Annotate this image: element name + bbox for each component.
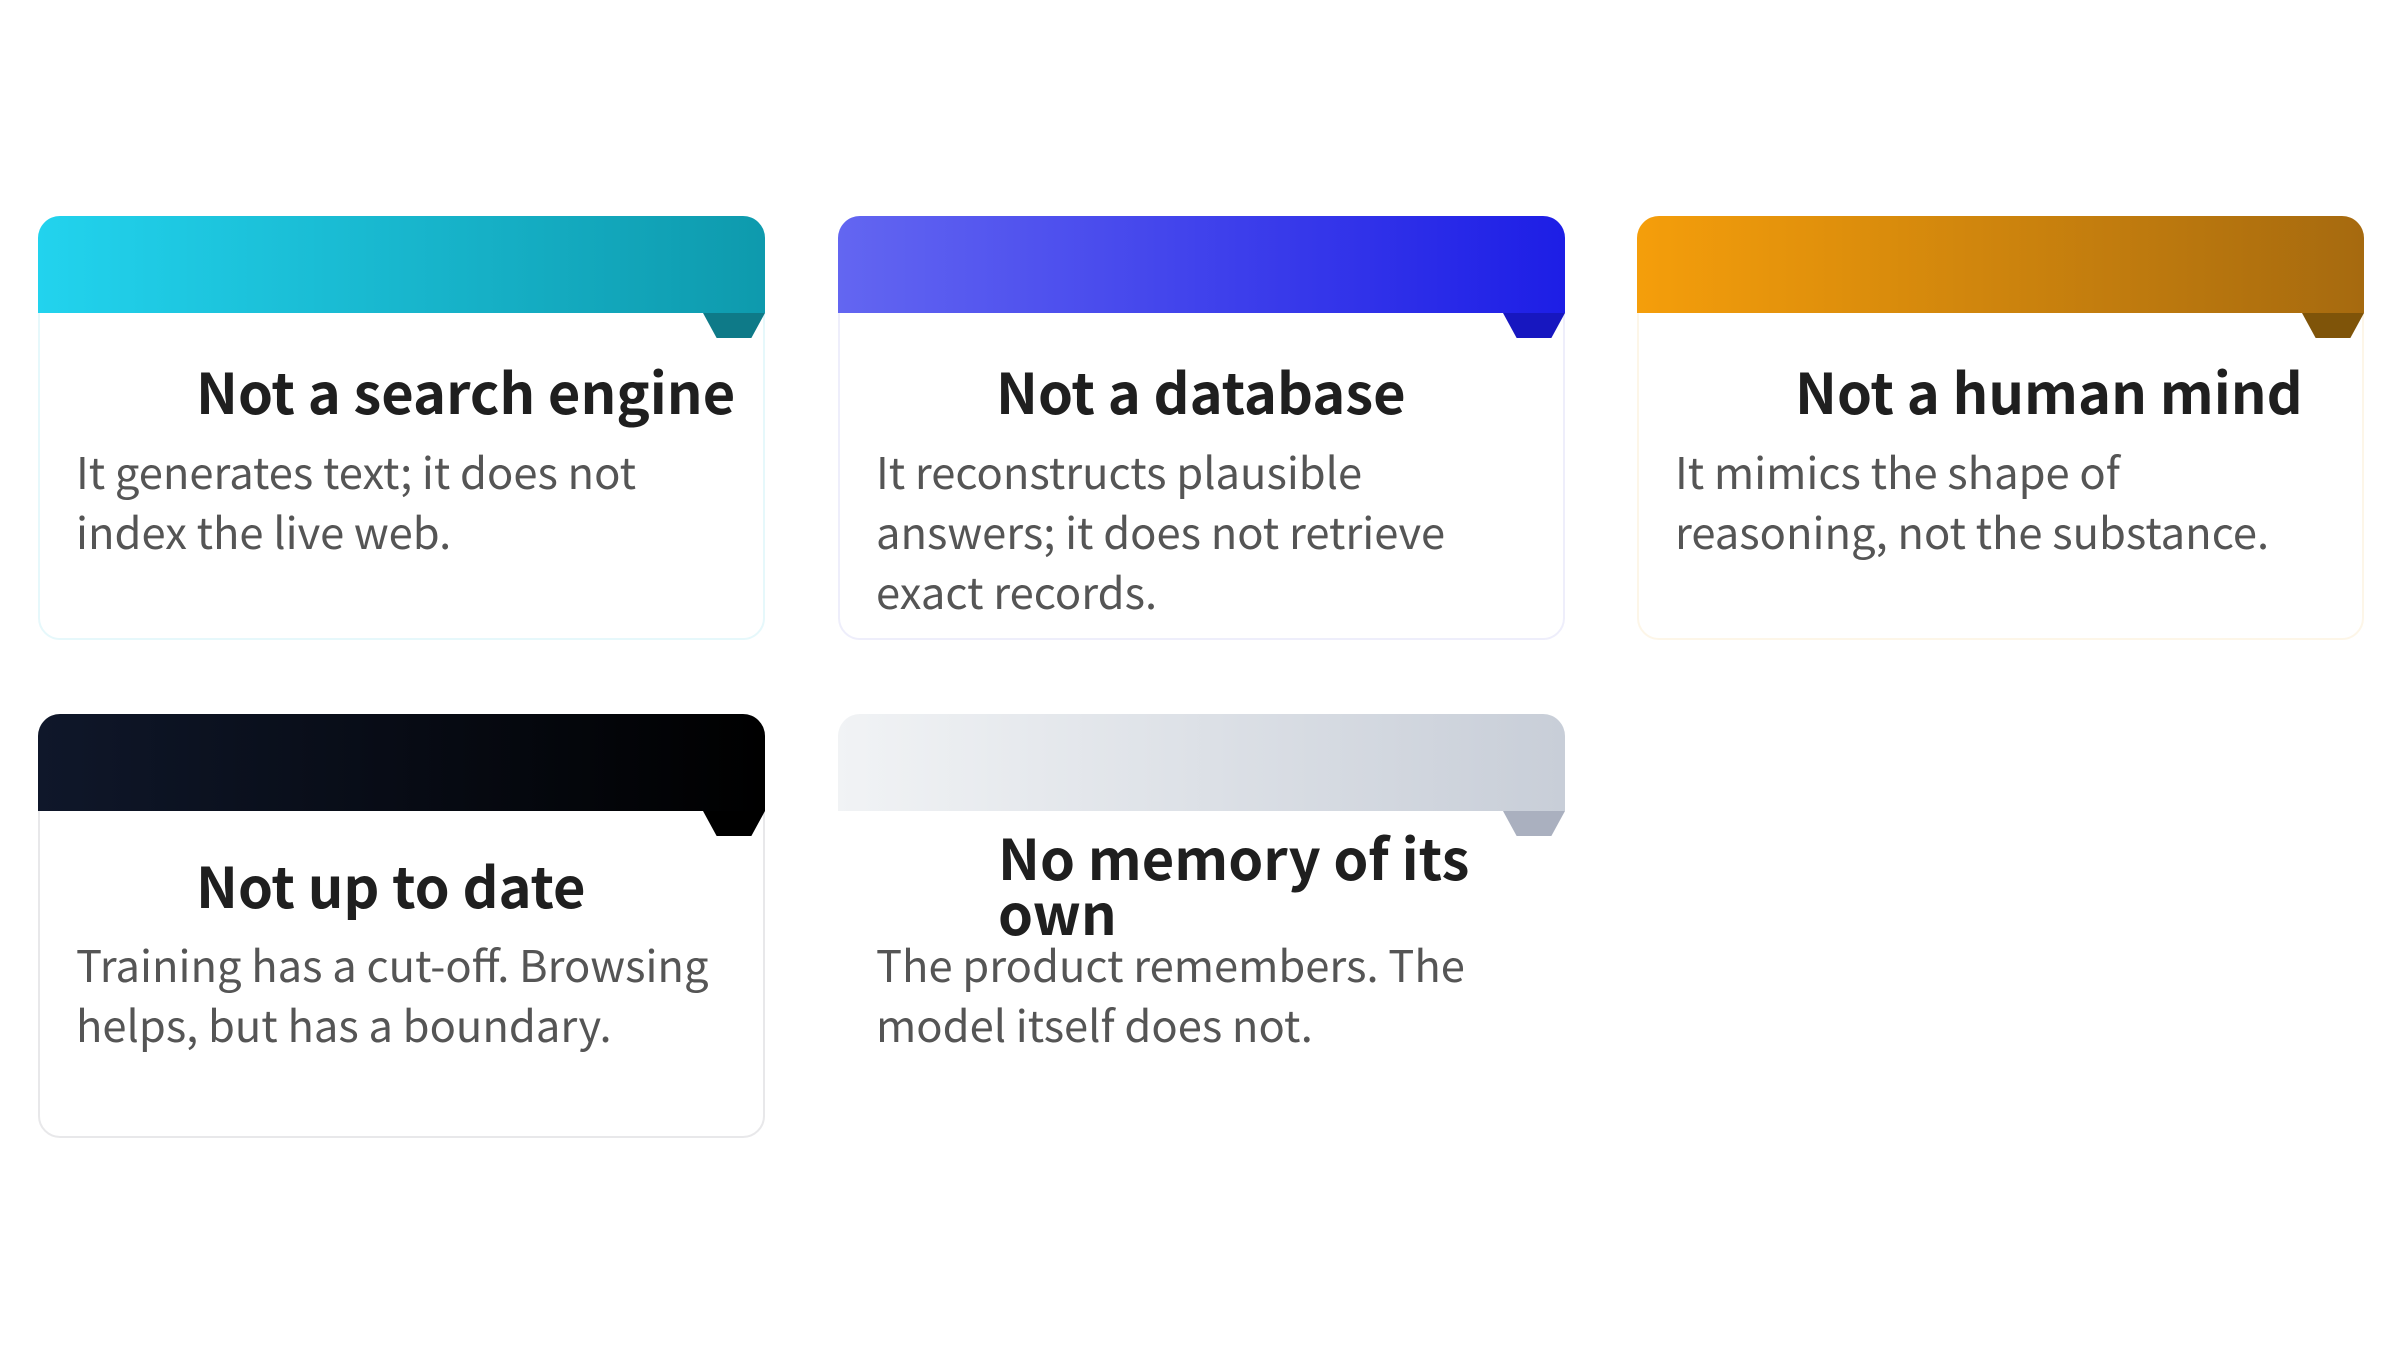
header bar <box>38 714 765 811</box>
ribbon tab <box>1503 811 1565 836</box>
title: Not a search engine <box>196 350 735 430</box>
body text: It generates text; it does not index the live web. <box>76 439 636 562</box>
header bar <box>38 216 765 313</box>
card: not a human mind <box>1637 216 2364 640</box>
header bar <box>838 216 1565 313</box>
ribbon tab <box>2302 313 2364 338</box>
title: Not a human mind <box>1795 350 2303 430</box>
ribbon tab <box>703 811 765 836</box>
title: No memory of its own <box>998 816 1469 952</box>
body text: The product remembers. The model itself does not. <box>876 932 1465 1055</box>
card: not a search engine <box>38 216 765 640</box>
header bar <box>1637 216 2364 313</box>
ribbon tab <box>703 313 765 338</box>
title: Not a database <box>996 350 1406 430</box>
card: not up to date <box>38 714 765 1138</box>
title: Not up to date <box>196 844 586 924</box>
card: no memory of its own <box>838 714 1565 1042</box>
card: not a database <box>838 216 1565 640</box>
body text: Training has a cut-off. Browsing helps, but has a boundary. <box>76 932 708 1055</box>
ribbon tab <box>1503 313 1565 338</box>
body text: It mimics the shape of reasoning, not the substance. <box>1675 439 2269 562</box>
header bar <box>838 714 1565 811</box>
body text: It reconstructs plausible answers; it does not retrieve exact records. <box>876 439 1445 622</box>
